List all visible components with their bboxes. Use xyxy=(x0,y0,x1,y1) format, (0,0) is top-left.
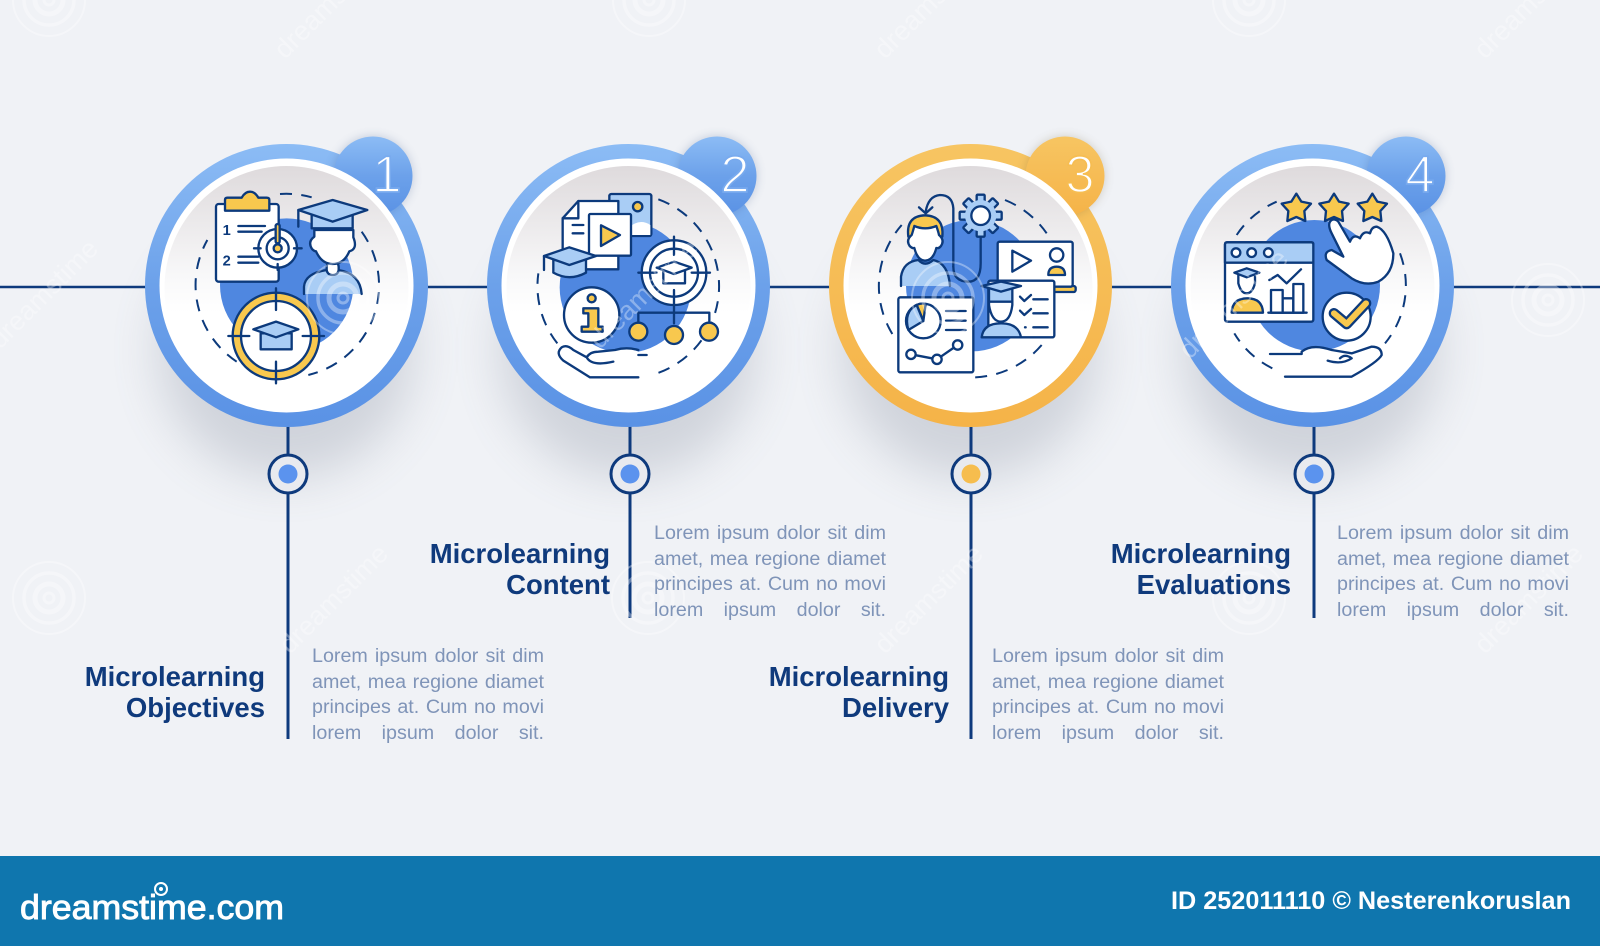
open hand xyxy=(1270,347,1382,377)
body text step 4: lorem ipsum dolor sit. xyxy=(1337,599,1569,621)
gear xyxy=(960,195,1002,237)
heading: Microlearning Objectives: Microlearning xyxy=(85,661,265,692)
footer band xyxy=(0,856,1600,946)
step 1 number badge: 1 xyxy=(373,146,401,204)
heading: Microlearning Content: Microlearning xyxy=(430,538,610,569)
clipboard xyxy=(216,192,302,282)
analytics window xyxy=(1225,242,1313,322)
infographic artwork: dreamstime xyxy=(583,233,704,354)
heading: Microlearning Objectives: Objectives xyxy=(126,692,265,723)
heading: Microlearning Evaluations: Microlearning xyxy=(1111,538,1291,569)
step 2 text xyxy=(430,522,886,621)
clipboard: 2 xyxy=(223,253,231,269)
body text step 3: principes at. Cum no movi xyxy=(992,696,1224,718)
step 4 number badge: 4 xyxy=(1406,146,1434,204)
step 3 ring xyxy=(829,144,1112,427)
step 2 ring xyxy=(487,144,770,427)
step 4 node xyxy=(1295,455,1333,493)
graduation cap xyxy=(544,247,596,277)
body text step 3: lorem ipsum dolor sit. xyxy=(992,722,1224,744)
heading: Microlearning Content: Content xyxy=(506,569,610,600)
step 4 number badge xyxy=(1366,136,1446,216)
step 1 graphic xyxy=(145,136,428,739)
report card xyxy=(898,297,973,372)
step 2 number badge xyxy=(678,136,756,216)
checklist and student xyxy=(982,281,1054,337)
feedback loop arrow xyxy=(919,195,981,282)
media files xyxy=(563,194,651,269)
body text step 4 xyxy=(1337,522,1569,621)
heading: Microlearning Delivery: Delivery xyxy=(842,692,949,723)
step 4 text xyxy=(1111,522,1569,621)
body text step 2: amet, mea regione diamet xyxy=(654,548,886,570)
heading: Microlearning Content xyxy=(430,538,610,600)
body text step 3 xyxy=(992,645,1224,744)
body text step 3: amet, mea regione diamet xyxy=(992,671,1224,693)
infographic artwork: dreamstime xyxy=(1468,538,1589,659)
body text step 1: Lorem ipsum dolor sit dim xyxy=(312,645,544,667)
body text step 3: Lorem ipsum dolor sit dim xyxy=(992,645,1224,667)
icon: content xyxy=(537,194,719,377)
body text step 2: principes at. Cum no movi xyxy=(654,573,886,595)
infographic artwork: dreamstime xyxy=(1173,243,1294,364)
body text step 2 xyxy=(654,522,886,621)
pointing hand xyxy=(1326,219,1393,284)
target and hierarchy xyxy=(629,237,718,344)
body text step 1: lorem ipsum dolor sit. xyxy=(312,722,544,744)
body text step 1: amet, mea regione diamet xyxy=(312,671,544,693)
heading: Microlearning Objectives xyxy=(85,661,265,723)
check badge xyxy=(1323,293,1371,341)
heading: Microlearning Delivery xyxy=(769,661,949,723)
step 2 graphic xyxy=(487,136,770,618)
step 1 number badge xyxy=(334,136,412,216)
body text step 1: principes at. Cum no movi xyxy=(312,696,544,718)
target with cap xyxy=(228,288,324,383)
open hand xyxy=(559,346,647,377)
body text step 2: lorem ipsum dolor sit. xyxy=(654,599,886,621)
timeline horizontal line xyxy=(0,286,1600,288)
step 4 ring xyxy=(1171,144,1454,427)
step 2 node xyxy=(611,455,649,493)
step 1 node xyxy=(269,455,307,493)
info circle xyxy=(564,287,619,343)
heading: Microlearning Delivery: Microlearning xyxy=(769,661,949,692)
step 2 number badge: 2 xyxy=(721,146,749,204)
step 3 number badge xyxy=(1026,136,1104,216)
body text step 4: Lorem ipsum dolor sit dim xyxy=(1337,522,1569,544)
body text step 1 xyxy=(312,645,544,744)
step 3 graphic xyxy=(829,136,1112,739)
step 3 text xyxy=(769,645,1224,744)
icon: evaluations xyxy=(1225,194,1406,377)
infographic artwork: dreamstime xyxy=(273,538,394,659)
step 4 graphic xyxy=(1171,136,1454,618)
heading: Microlearning Evaluations xyxy=(1111,538,1291,600)
infographic artwork: dreamstime xyxy=(868,538,989,659)
step 1 text xyxy=(85,645,544,744)
body text step 4: principes at. Cum no movi xyxy=(1337,573,1569,595)
step 3 node xyxy=(952,455,990,493)
rating stars xyxy=(1282,194,1387,221)
icon: delivery xyxy=(879,195,1076,377)
heading: Microlearning Evaluations: Evaluations xyxy=(1137,569,1291,600)
body text step 4: amet, mea regione diamet xyxy=(1337,548,1569,570)
step 3 number badge: 3 xyxy=(1066,146,1094,204)
icon: objectives xyxy=(196,192,379,383)
footer credit: ID 252011110 © Nesterenkoruslan xyxy=(1171,887,1571,915)
clipboard: 1 xyxy=(223,223,231,239)
body text step 2: Lorem ipsum dolor sit dim xyxy=(654,522,886,544)
student with cap xyxy=(298,200,367,294)
step 1 ring xyxy=(145,144,428,427)
video monitor xyxy=(998,242,1076,292)
teacher xyxy=(901,215,950,286)
footer logo: dreamstime.com xyxy=(20,889,284,927)
